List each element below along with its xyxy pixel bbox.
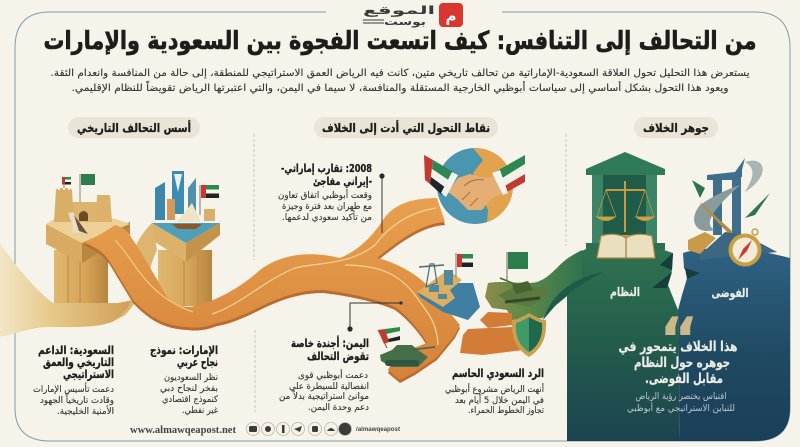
logo: بوست (384, 17, 426, 28)
footer social handle: /almawqeapost (356, 427, 400, 433)
icon: oil platform on island (417, 253, 480, 320)
callout: 2008 rapprochement: وقعت أبوظبي اتفاق تعاون (278, 189, 372, 201)
text block: Saudi Arabia: التاريخي والعمق (43, 355, 114, 370)
logo: م (446, 7, 456, 25)
callout: 2008 rapprochement: 2008: تقارب إماراتي- (281, 162, 372, 175)
icon: skyline with dhow and flag (155, 171, 219, 229)
text block: Yemen: تقوض التحالف (307, 349, 369, 364)
quote mark: “ (659, 305, 699, 375)
text block: Saudi response: الرد السعودي الحاسم (452, 366, 544, 381)
section heading: foundations (68, 117, 200, 138)
icon: court building with scales and book (586, 152, 665, 258)
order label: النظام (610, 285, 640, 300)
text block: Saudi Arabia: الأمنية الخليجية. (57, 405, 114, 417)
text block: Saudi Arabia: السعودية: الداعم (38, 343, 114, 358)
section heading: core of dispute: جوهر الخلاف (643, 121, 709, 136)
gold ribbon rising behind right pillar (112, 223, 157, 322)
footer social icons (246, 422, 352, 436)
text block: Saudi response: في اليمن خلال 5 أيام بعد (455, 394, 544, 406)
callout: 2008 rapprochement: من تأكيد سعودي لدعمها. (282, 210, 372, 223)
callout: 2008 rapprochement: -إيراني مفاجئ (313, 175, 372, 188)
icon: castle with falcon and flags (54, 174, 112, 234)
text block: UAE: نجاح عربي (177, 355, 218, 369)
quote text (618, 339, 738, 387)
section heading: turning points: نقاط التحول التي أدت إلى الخلاف (322, 120, 490, 136)
text block: Yemen: موانئ استراتيجية بدلاً من (279, 390, 369, 402)
text block: Saudi Arabia: دعمت تأسيس الإمارات (33, 382, 114, 395)
icon: UAE flag and tank (378, 327, 435, 367)
text block: Yemen: اليمن: أجندة خاصة (291, 335, 369, 350)
section heading: turning points (314, 117, 498, 138)
intro text: ويعود هذا التحول بشكل أساسي إلى سياسات أبوظبي الخارجية المستقلة والمنافسة، لا سيما في اليمن، والتي اعتبرتها الرياض تقويضاً للنظام الإقليمي. (72, 80, 729, 94)
logo (363, 3, 463, 28)
callout: 2008 rapprochement (278, 162, 385, 233)
quote attribution (627, 392, 735, 414)
footer website: www.almawqeapost.net (130, 425, 237, 436)
text block: Yemen: دعمت أبوظبي قوى (298, 369, 368, 381)
pillar: right (152, 223, 220, 306)
section heading: core of dispute (634, 117, 718, 138)
green land with Saudi flag and tank (485, 250, 603, 320)
logo: الموقع (363, 4, 435, 17)
quote text: مقابل الفوضى. (645, 371, 723, 387)
icon: handshake over split globe (424, 148, 525, 224)
text block: UAE: بفخر لنجاح دبي (160, 384, 218, 394)
quote attribution: اقتباس يختصر رؤية الرياض (636, 392, 726, 402)
text block: UAE: غير نفطي. (182, 406, 218, 416)
chaos label: الفوضى (712, 286, 748, 301)
text block: Saudi Arabia (33, 343, 114, 417)
icon: shield (512, 313, 546, 357)
text block: Yemen (279, 335, 369, 413)
pillar: left (46, 218, 130, 306)
text block: UAE: الإمارات: نموذج (150, 343, 218, 358)
text block: Saudi response: أنهت الرياض مشروع أبوظبي (445, 383, 544, 395)
quote text: هذا الخلاف يتمحور في (618, 339, 738, 355)
text block: UAE: كنموذج اقتصادي (162, 395, 219, 405)
text block: UAE: نظر السعوديون (164, 373, 218, 383)
left gold swoosh (0, 243, 133, 337)
quote attribution: للتباين الاستراتيجي مع أبوظبي (627, 402, 735, 414)
text block: Yemen: انفصالية للسيطرة علي (289, 382, 369, 392)
orange ribbon: main road with branches (83, 198, 460, 383)
intro text: يستعرض هذا التحليل تحول العلاقة السعودية-الإماراتية من تحالف تاريخي متين، كانت فيه الرياض العمق الاستراتيجي للمنطقة، إلى حالة من المنافسة وانعدام الثقة. (50, 68, 750, 79)
text block: UAE (150, 343, 219, 416)
orange land fragments (460, 312, 523, 355)
icon: ruined columns with swirl and compass (688, 158, 777, 266)
intro text (50, 68, 750, 94)
dark panel: order versus chaos (567, 243, 790, 441)
text block: Saudi response (445, 366, 544, 416)
text block: Saudi Arabia: وقادت تاريخياً الجهود (40, 393, 114, 406)
connector: Yemen callout (347, 301, 403, 332)
text block: Saudi Arabia: الاستراتيجي (63, 367, 114, 381)
section heading: foundations: أسس التحالف التاريخي (77, 120, 191, 135)
callout: 2008 rapprochement: مع طهران بعد فترة وجيزة (282, 202, 372, 212)
quote text: جوهره حول النظام (634, 355, 730, 371)
text block: Saudi response: تجاوز الخطوط الحمراء. (468, 406, 544, 416)
text block: Yemen: دعم وحدة اليمن. (308, 403, 369, 413)
